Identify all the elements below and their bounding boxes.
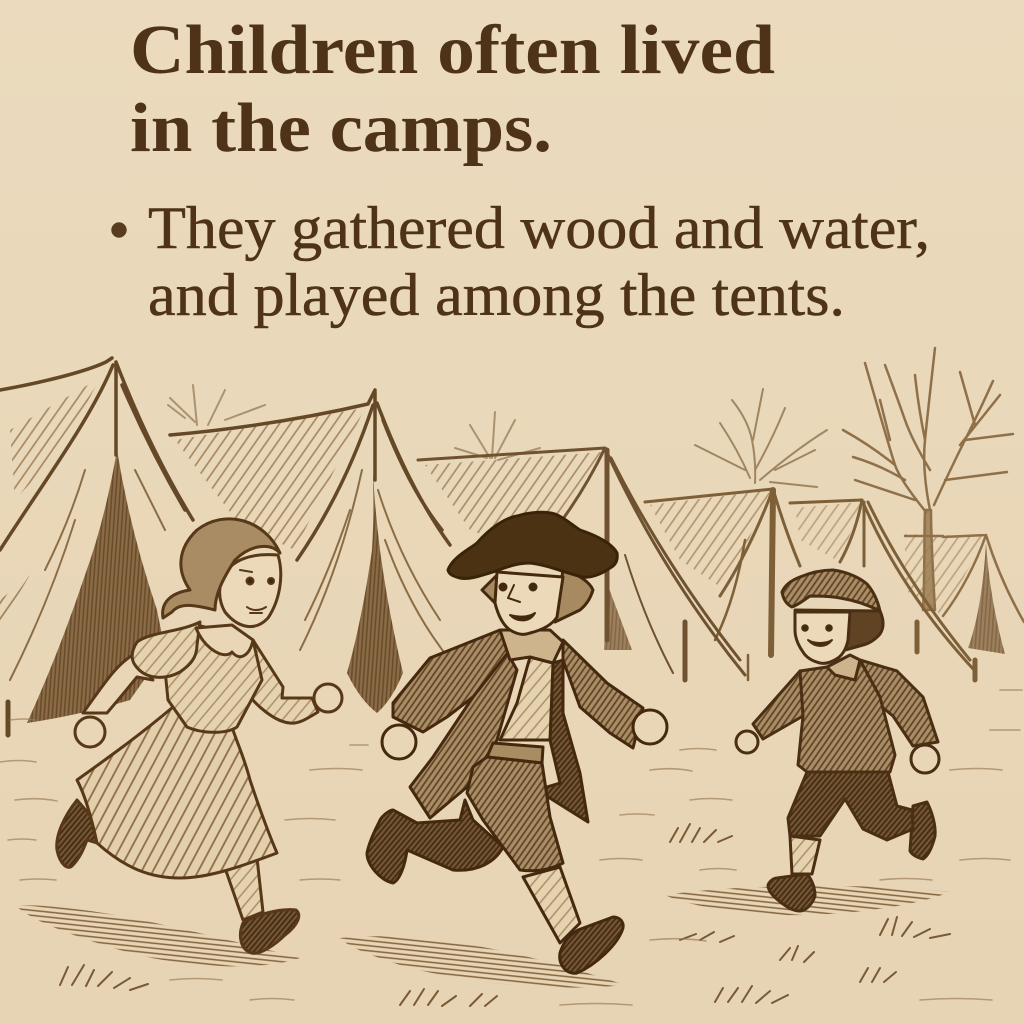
bullet text: and played among the tents. bbox=[148, 262, 845, 328]
shadow under small boy bbox=[665, 886, 950, 915]
girl facial features bbox=[240, 570, 274, 613]
small boy front leg bbox=[790, 836, 820, 874]
boy left sleeve bbox=[393, 630, 510, 732]
boy back leg and shoe bbox=[367, 800, 503, 883]
bullet text: They gathered wood and water, bbox=[148, 195, 930, 261]
girl puff sleeve bbox=[132, 622, 200, 677]
tent 1 bbox=[0, 358, 193, 735]
boy tricorn hat bbox=[448, 512, 617, 579]
tall boy in tricorn running bbox=[367, 512, 667, 973]
title: in the camps. bbox=[130, 90, 552, 167]
small boy facial features bbox=[802, 625, 832, 646]
boy face bbox=[495, 572, 563, 634]
boy coat back panel bbox=[537, 660, 588, 822]
small boy running bbox=[736, 570, 939, 911]
boy stocking bbox=[523, 867, 580, 943]
girl headscarf bbox=[163, 519, 280, 618]
small boy right sleeve bbox=[860, 660, 938, 746]
bullet text bbox=[112, 195, 930, 328]
grass tufts bbox=[60, 824, 950, 1006]
girl front shoe bbox=[240, 910, 299, 953]
small boy back shoe bbox=[910, 802, 935, 859]
girl back shoe bbox=[57, 800, 97, 867]
small boy hair bbox=[795, 610, 883, 650]
boy breeches bbox=[467, 757, 563, 871]
tent 3 bbox=[418, 448, 745, 680]
tent far right bbox=[905, 534, 1024, 654]
boy hair bbox=[482, 570, 593, 622]
small boy cap bbox=[782, 570, 880, 611]
ground shadows and grass bbox=[0, 690, 1022, 1006]
girl face bbox=[220, 555, 281, 627]
far bare shrub two bbox=[168, 385, 265, 425]
girl left arm bbox=[83, 655, 153, 713]
mid bare tree bbox=[695, 389, 827, 487]
tent 2 bbox=[170, 390, 450, 713]
boy belt bbox=[487, 743, 543, 763]
boy collar bbox=[500, 630, 563, 663]
far bare shrub one bbox=[455, 412, 540, 460]
girl front leg bbox=[225, 858, 263, 920]
girl right arm bbox=[245, 640, 318, 723]
boy shirt bbox=[500, 657, 553, 740]
small boy front shoe bbox=[768, 874, 815, 911]
small boy left sleeve bbox=[753, 671, 815, 739]
boy hands bbox=[382, 710, 667, 759]
boy front shoe bbox=[560, 917, 623, 973]
title: Children often lived bbox=[130, 12, 775, 89]
boy right sleeve bbox=[563, 640, 643, 748]
small boy face bbox=[795, 612, 850, 663]
girl hands bbox=[75, 684, 342, 747]
boy facial features bbox=[500, 584, 536, 620]
girl running bbox=[57, 519, 342, 953]
small boy shorts bbox=[788, 772, 913, 840]
large bare tree bbox=[843, 348, 1013, 610]
girl bodice bbox=[165, 625, 262, 732]
girl skirt bbox=[77, 707, 277, 878]
bare trees in the distance bbox=[168, 348, 1013, 610]
small boy hands bbox=[736, 731, 939, 773]
shadow under girl bbox=[15, 905, 300, 966]
shadow under tall boy bbox=[340, 936, 625, 988]
tent 5 bbox=[790, 500, 975, 680]
title bbox=[130, 12, 775, 167]
small boy jacket bbox=[798, 660, 895, 772]
small boy collar bbox=[827, 655, 860, 680]
boy coat front panel bbox=[410, 640, 517, 818]
girl collar bbox=[196, 625, 253, 657]
tent 4 bbox=[645, 489, 800, 680]
ground scratches bbox=[0, 690, 1022, 1005]
